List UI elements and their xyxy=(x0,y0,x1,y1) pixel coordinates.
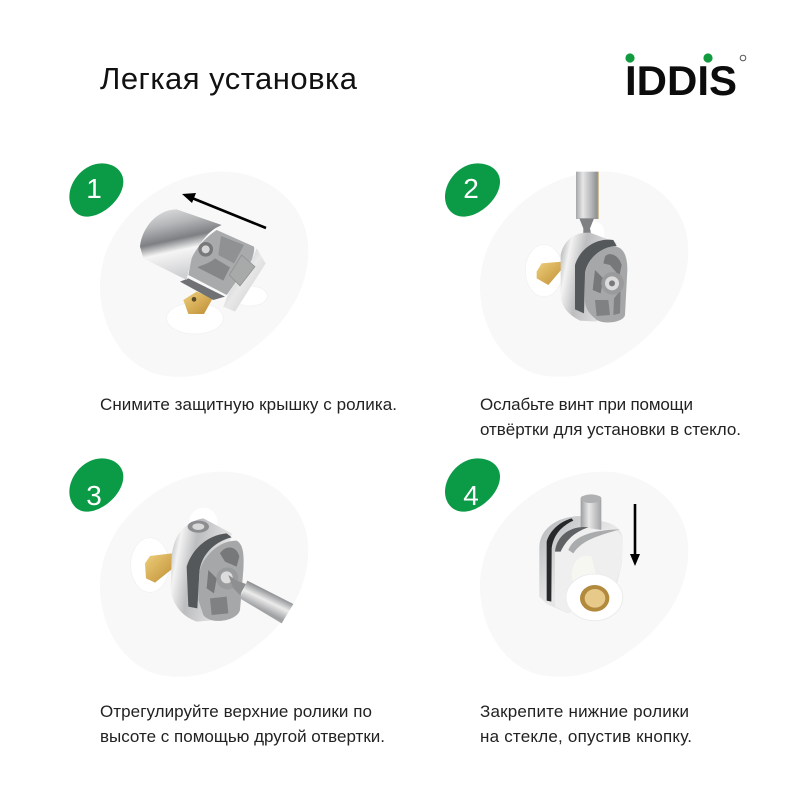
step 3 caption xyxy=(100,702,385,746)
step 2 blob and photo xyxy=(480,172,688,377)
step 3 xyxy=(69,458,385,746)
step 1 xyxy=(69,163,397,414)
step 1 caption: Снимите защитную крышку с ролика. xyxy=(100,395,397,414)
arrow: step 1 xyxy=(182,193,266,228)
logo: IDDIS: IDDIS xyxy=(625,57,737,104)
step 4 badge: 4 xyxy=(463,480,479,511)
step 3 caption: Отрегулируйте верхние ролики по xyxy=(100,702,372,721)
step 3 caption: высоте с помощью другой отвертки. xyxy=(100,727,385,746)
step 2 caption: отвёртки для установки в стекло. xyxy=(480,420,741,439)
step 2 badge: 2 xyxy=(463,173,479,204)
step 3 badge: 3 xyxy=(86,480,102,511)
step 4 xyxy=(445,458,692,746)
step 1 blob and photo xyxy=(100,172,308,377)
step 2 badge xyxy=(445,163,500,217)
step 4 caption: на стекле, опустив кнопку. xyxy=(480,727,692,746)
arrow: step 4 xyxy=(630,504,640,566)
step 4 caption: Закрепите нижние ролики xyxy=(480,702,689,721)
step 2 caption: Ослабьте винт при помощи xyxy=(480,395,693,414)
step 3 blob and photo xyxy=(100,472,308,677)
step 2 xyxy=(445,163,741,439)
step 3 badge xyxy=(69,458,123,512)
title: Легкая установка xyxy=(100,61,358,96)
step 4 badge xyxy=(445,458,500,512)
step 4 blob and photo xyxy=(480,472,688,677)
step 2 caption xyxy=(480,395,741,439)
step 1 badge xyxy=(69,163,123,217)
step 4 caption xyxy=(480,702,692,746)
step 1 badge: 1 xyxy=(86,173,102,204)
